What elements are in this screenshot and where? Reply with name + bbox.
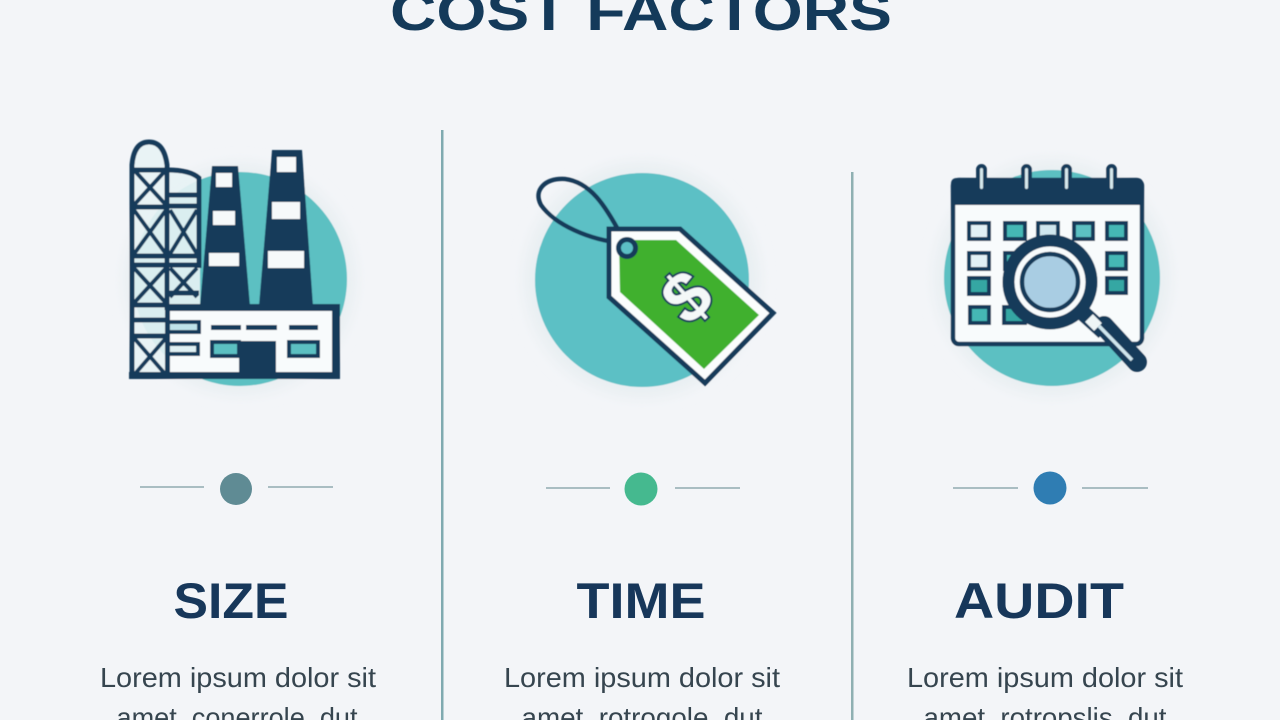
text block: time: Lorem ipsum dolor sit [504, 662, 780, 693]
date cells [969, 223, 1126, 323]
column divider left [441, 130, 444, 720]
icon: calendar with magnifier [934, 160, 1170, 396]
text block: time [504, 662, 780, 720]
text block: audit: Lorem ipsum dolor sit [907, 662, 1183, 693]
text block: size: Lorem ipsum dolor sit [100, 662, 376, 693]
factory building [129, 304, 340, 379]
text block: audit [907, 662, 1183, 720]
icon: factory [124, 142, 356, 395]
separator: time [546, 472, 740, 506]
magnifier lens [1008, 240, 1092, 324]
tower fill [132, 142, 200, 378]
heading: time: TIME [576, 573, 706, 629]
tag hole [618, 240, 636, 256]
smokestack right [259, 150, 313, 306]
magnifier handle [1084, 314, 1104, 332]
heading: size: SIZE [174, 573, 288, 629]
binder rings [978, 166, 1115, 191]
smokestack left [200, 166, 250, 306]
heading: audit: AUDIT [954, 573, 1124, 629]
separator: audit [953, 472, 1148, 504]
separator: size [140, 473, 333, 505]
tag body [609, 229, 773, 383]
icon: price tag [524, 162, 773, 398]
text block: size [100, 662, 376, 720]
dollar sign: $ [646, 255, 727, 339]
column divider right [851, 172, 854, 720]
tag string [538, 179, 622, 243]
